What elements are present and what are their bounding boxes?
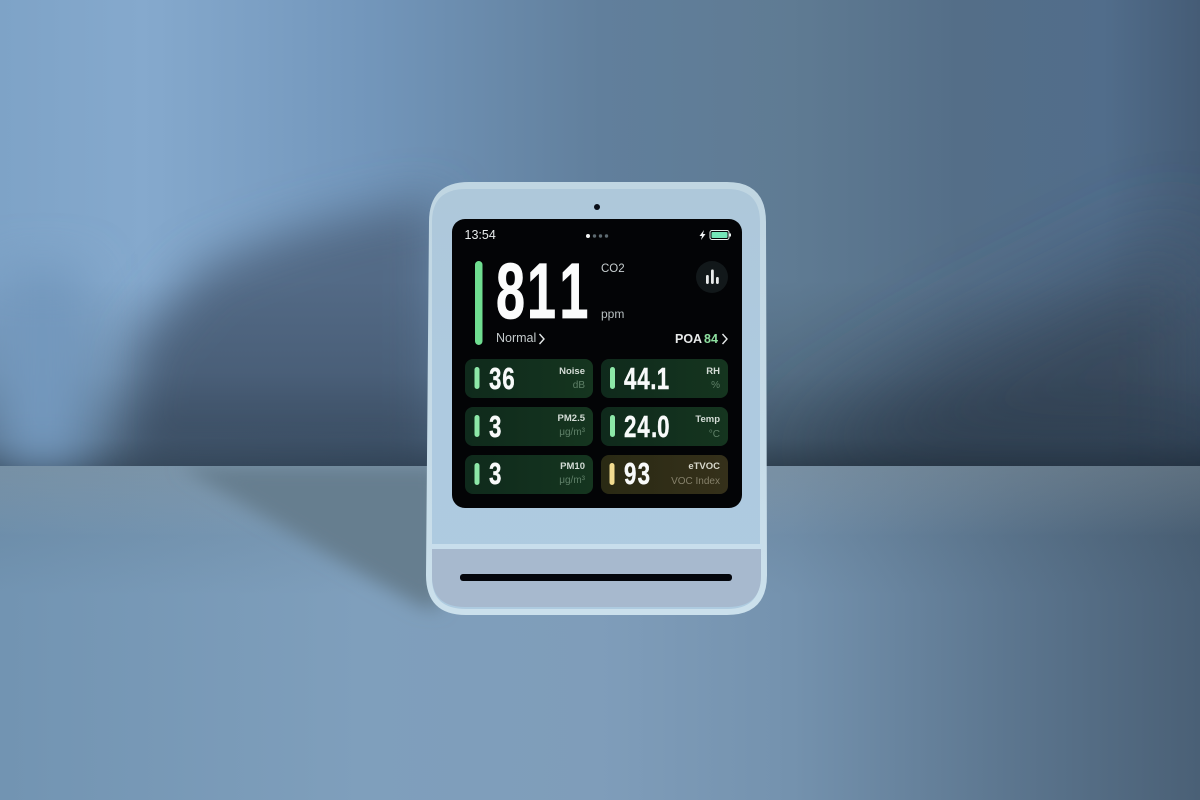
speaker grille (431, 544, 762, 607)
card: pm10: 3 (489, 456, 501, 491)
card: noise (465, 359, 593, 398)
card: pm10: μg/m³ (559, 475, 586, 486)
card: noise: Noise (559, 366, 585, 377)
card: humidity: % (711, 380, 720, 391)
icon: chart button (696, 261, 728, 293)
card: noise: dB (573, 380, 585, 391)
camera dot (594, 204, 600, 210)
card: humidity: RH (706, 366, 720, 377)
poa status (675, 332, 727, 346)
card: humidity: 44.1 (624, 361, 669, 396)
card: etvoc: VOC Index (671, 476, 720, 487)
card: temperature (601, 407, 728, 446)
card: temperature: Temp (695, 414, 720, 425)
page dots (586, 234, 608, 238)
speaker slot (460, 574, 732, 581)
poa status: 84 (704, 332, 718, 346)
card: etvoc (601, 455, 728, 494)
co2 unit: ppm (601, 307, 624, 321)
background wall (0, 0, 1200, 466)
card: pm2.5: PM2.5 (558, 413, 586, 424)
co2 value: 811 (496, 247, 588, 336)
device body (426, 182, 767, 615)
poa status: POA (675, 332, 702, 346)
card: humidity (601, 359, 728, 398)
card: noise: 36 (489, 361, 515, 396)
screen (452, 219, 742, 508)
icon: battery (710, 230, 731, 240)
card: pm2.5 (465, 407, 593, 446)
card: pm10: PM10 (560, 461, 585, 472)
background table (0, 466, 1200, 800)
icon: charging bolt (700, 230, 706, 240)
card: etvoc: eTVOC (688, 461, 720, 472)
co2 level bar (475, 261, 482, 345)
card: pm2.5: 3 (489, 409, 501, 444)
card: temperature: 24.0 (624, 409, 670, 444)
co2 label: CO2 (601, 263, 625, 275)
normal status: Normal (496, 331, 536, 345)
card: temperature: °C (709, 429, 720, 440)
card: etvoc: 93 (624, 456, 650, 491)
device (426, 182, 767, 615)
card: pm10 (465, 455, 593, 494)
status time: 13:54 (464, 228, 496, 242)
card: pm2.5: μg/m³ (559, 427, 586, 438)
